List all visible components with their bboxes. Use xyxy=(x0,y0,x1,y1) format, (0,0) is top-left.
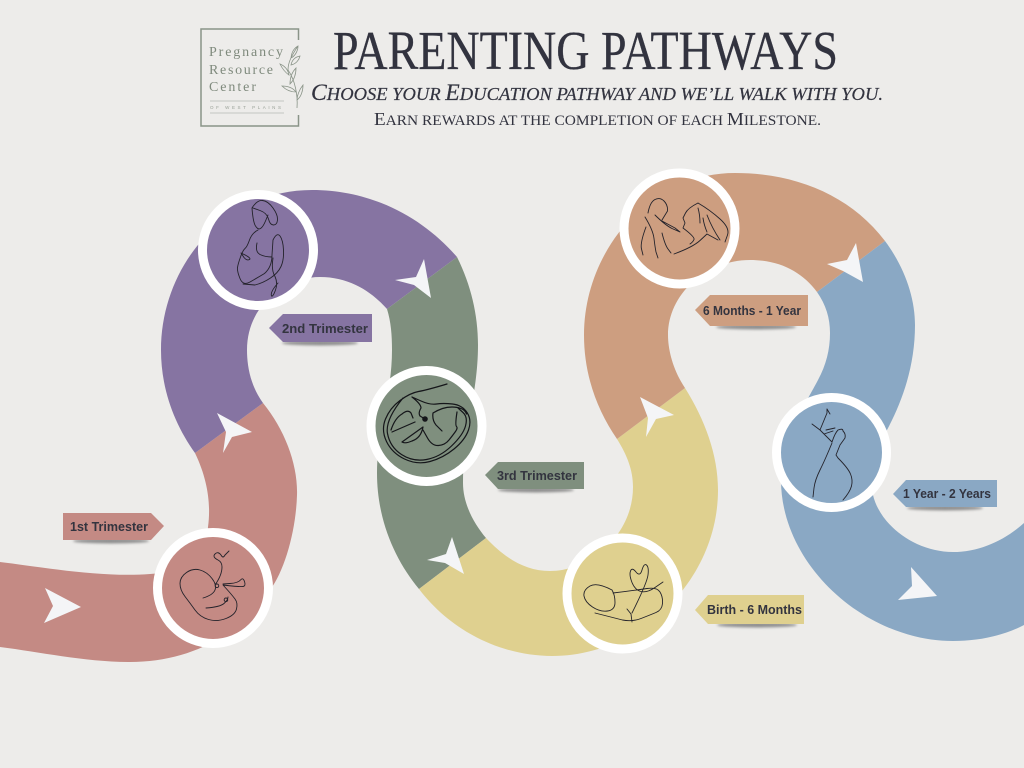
icon: sleeping baby and heart xyxy=(584,565,663,622)
label: 2nd trimester: 2nd Trimester xyxy=(282,322,368,336)
segment: 2nd trimester xyxy=(161,190,457,453)
label: 3rd trimester xyxy=(485,462,584,492)
label: 2nd trimester xyxy=(269,314,372,346)
arrow: end xyxy=(898,567,937,600)
pathway ribbon xyxy=(0,173,1024,662)
icon: embryo xyxy=(180,551,245,621)
circle badge xyxy=(371,370,482,482)
milestone: birth to 6 months xyxy=(567,538,804,649)
logo: Resource xyxy=(209,63,273,78)
segment: 1st trimester xyxy=(0,403,297,662)
label: 1 year to 2 years: 1 Year - 2 Years xyxy=(903,487,991,501)
label: birth to 6 months xyxy=(695,595,804,628)
tagline: CHOOSE YOUR EDUCATION PATHWAY AND WE’LL WALK WITH YOU. xyxy=(311,80,883,105)
circle badge xyxy=(624,173,735,284)
icon: mother lifting baby xyxy=(641,199,728,258)
icon: holding hands xyxy=(812,409,852,500)
milestone: 2nd trimester xyxy=(202,194,372,346)
logo: OF WEST PLAINS xyxy=(210,105,281,110)
milestone: 1st trimester xyxy=(63,513,268,644)
label: 1st trimester: 1st Trimester xyxy=(70,520,148,534)
segment: birth to 6 months xyxy=(419,388,718,656)
logo: Center xyxy=(209,80,256,95)
logo xyxy=(201,29,303,126)
label: 1 year to 2 years xyxy=(893,480,997,510)
label: 3rd trimester: 3rd Trimester xyxy=(497,469,577,483)
arrow: tan to blue xyxy=(827,243,863,282)
label: 1st trimester xyxy=(63,513,164,544)
circle badge xyxy=(202,194,314,306)
segment: 1 year to 2 years xyxy=(781,241,1024,641)
icon: pregnant woman xyxy=(237,200,284,296)
label: 6 months to 1 year xyxy=(695,295,808,330)
rewards line: EARN REWARDS AT THE COMPLETION OF EACH MILESTONE. xyxy=(374,109,821,129)
label: 6 months to 1 year: 6 Months - 1 Year xyxy=(703,304,801,318)
circle badge xyxy=(158,532,268,644)
segment: 3rd trimester xyxy=(377,257,486,589)
arrow: yellow to tan xyxy=(640,397,674,437)
arrow: pink to purple xyxy=(217,413,252,453)
icon: fetus in womb xyxy=(383,384,470,463)
circle badge xyxy=(567,538,678,649)
arrow: purple to green xyxy=(395,259,431,298)
title: PARENTING PATHWAYS xyxy=(333,20,838,81)
segment: 6 months to 1 year xyxy=(584,173,885,439)
milestone: 1 year to 2 years xyxy=(776,398,997,510)
header xyxy=(201,20,883,129)
label: birth to 6 months: Birth - 6 Months xyxy=(707,603,802,617)
arrow: green to yellow xyxy=(427,537,464,574)
milestone: 6 months to 1 year xyxy=(624,173,808,330)
knot xyxy=(422,416,428,422)
arrow: start xyxy=(44,588,81,623)
milestone: 3rd trimester xyxy=(371,370,584,492)
logo: Pregnancy xyxy=(209,45,283,60)
circle badge xyxy=(776,398,886,508)
